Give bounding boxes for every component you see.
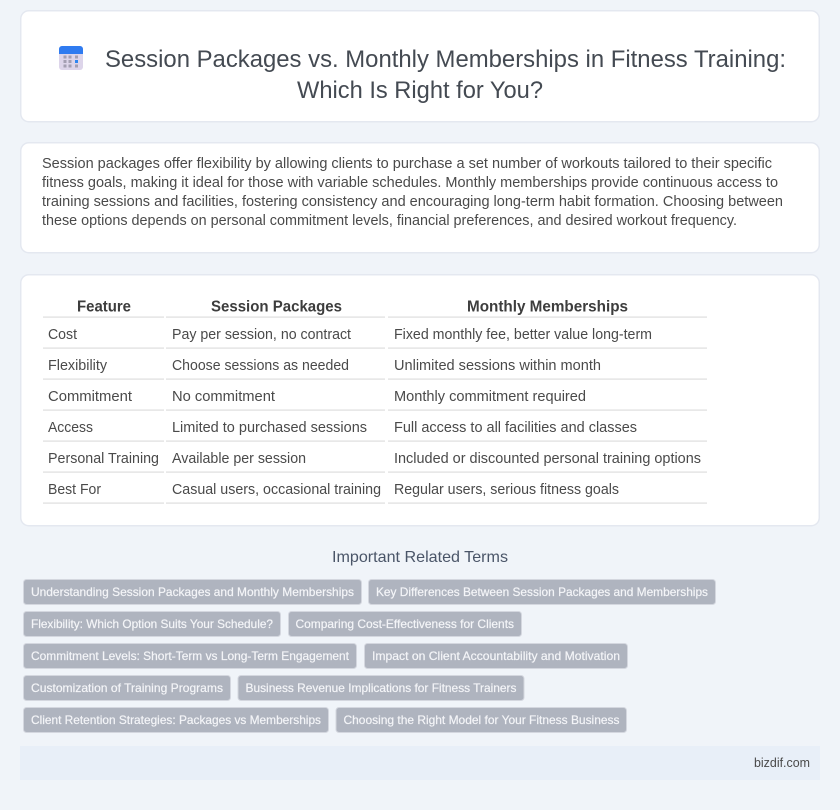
text block: introduction paragraph: Session packages offer flexibility by allowing clients to purchase a set number of workouts tailored to their specific (42, 156, 772, 172)
related term tags (24, 580, 716, 732)
tag (368, 580, 716, 604)
table header (77, 298, 628, 316)
table row: cost: Pay per session, no contract (172, 327, 351, 343)
table row: access: Limited to purchased sessions (172, 420, 367, 436)
tag: Commitment Levels: Short-Term vs Long-Term Engagement (31, 649, 350, 663)
table row: flexibility (48, 358, 601, 374)
tag (24, 644, 356, 668)
panel: comparison table (21, 275, 819, 526)
table row: cost: Fixed monthly fee, better value long-term (394, 327, 652, 343)
table header: Monthly Memberships (467, 298, 628, 316)
tag (24, 676, 230, 700)
table row: best for: Best For (48, 482, 101, 498)
footer: bizdif.com (754, 755, 810, 770)
table row: commitment (48, 389, 586, 405)
table row: best for: Regular users, serious fitness goals (394, 482, 619, 498)
tag (24, 580, 362, 604)
tag: Business Revenue Implications for Fitness Trainers (246, 681, 516, 695)
table row: personal training (48, 451, 701, 467)
text block: introduction paragraph: training sessions and facilities, fostering consistency and encouraging long-term habit formation. Choosing between (42, 194, 783, 210)
table row: personal training: Personal Training (48, 451, 159, 467)
table header: Feature (77, 298, 131, 316)
text block: introduction paragraph: these options depends on personal commitment levels, financial preferences, and desired workout frequency. (42, 213, 737, 229)
text block: introduction paragraph (42, 156, 783, 229)
tag: Understanding Session Packages and Monthly Memberships (31, 585, 354, 599)
title: Which Is Right for You? (297, 77, 543, 104)
table row: access: Access (48, 420, 93, 436)
table header: Session Packages (211, 298, 342, 316)
title: Session Packages vs. Monthly Memberships in Fitness Training: (105, 46, 786, 73)
title (105, 46, 786, 104)
tag: Impact on Client Accountability and Motivation (372, 649, 620, 663)
tag: Flexibility: Which Option Suits Your Schedule? (31, 617, 273, 631)
table row: cost (48, 327, 652, 343)
table row: best for (48, 482, 619, 498)
text block: introduction paragraph: fitness goals, making it ideal for those with variable schedules. Monthly memberships provide continuous access to (42, 175, 778, 191)
table row: access (48, 420, 637, 436)
table row: flexibility: Unlimited sessions within month (394, 358, 601, 374)
table row: personal training: Included or discounted personal training options (394, 451, 701, 467)
tag: Key Differences Between Session Packages and Memberships (376, 585, 708, 599)
footer (20, 746, 820, 780)
table row: commitment: Monthly commitment required (394, 389, 586, 405)
table row: personal training: Available per session (172, 451, 306, 467)
tag: Customization of Training Programs (31, 681, 223, 695)
panel: introduction (21, 143, 819, 253)
table row: flexibility: Flexibility (48, 358, 108, 374)
table row: best for: Casual users, occasional training (172, 482, 381, 498)
tag: Comparing Cost-Effectiveness for Clients (296, 617, 514, 631)
icon: calendar (59, 46, 83, 70)
tag (364, 644, 628, 668)
table row: commitment: Commitment (48, 389, 132, 405)
tag: Client Retention Strategies: Packages vs Memberships (31, 713, 321, 727)
table row: flexibility: Choose sessions as needed (172, 358, 349, 374)
table row: cost: Cost (48, 327, 77, 343)
tag (24, 708, 328, 732)
table row: commitment: No commitment (172, 389, 275, 405)
heading: important related terms: Important Related Terms (332, 549, 508, 566)
tag: Choosing the Right Model for Your Fitness Business (344, 713, 620, 727)
tag (288, 612, 522, 636)
table row: access: Full access to all facilities and classes (394, 420, 637, 436)
panel: title header (21, 11, 819, 122)
tag (238, 676, 524, 700)
tag (336, 708, 626, 732)
tag (24, 612, 280, 636)
